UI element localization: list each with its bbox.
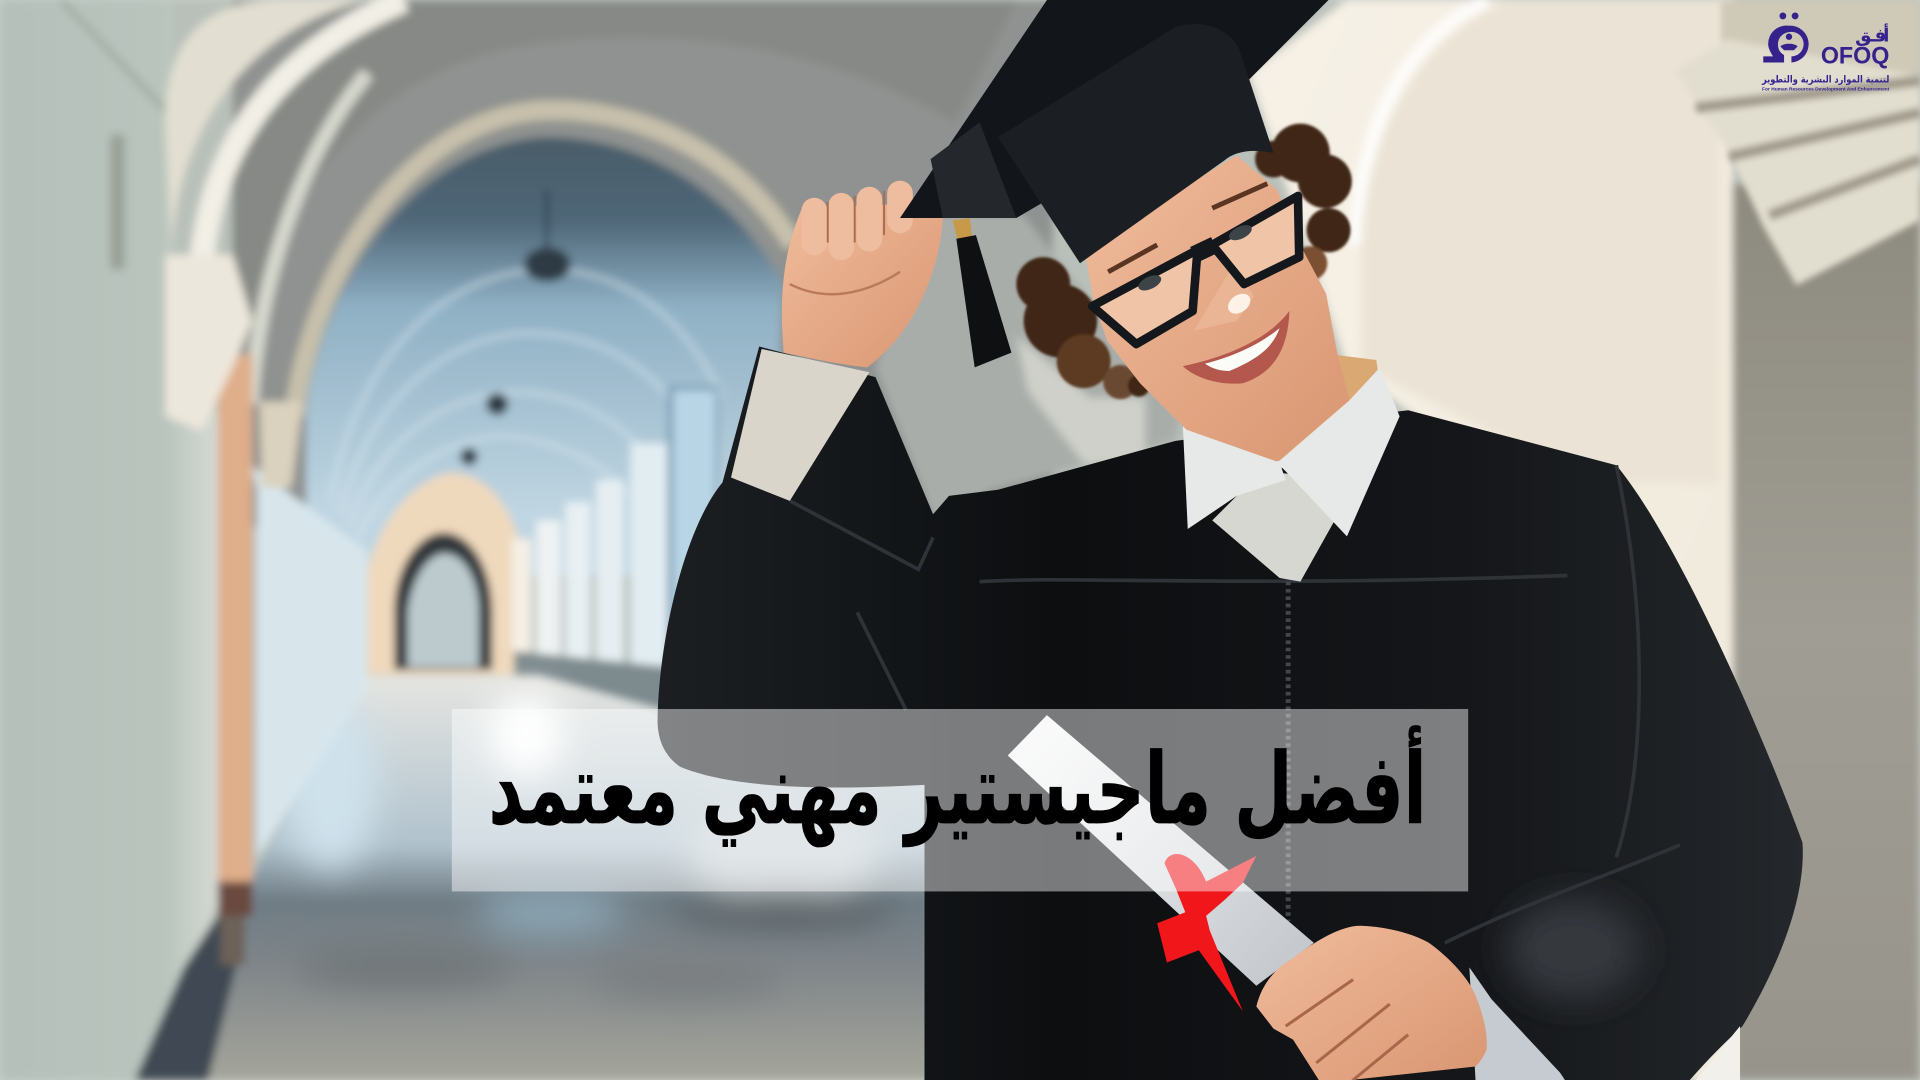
eyebrows bbox=[1108, 184, 1267, 272]
logo arabic tagline: لتنمية الموارد البشرية والتطوير bbox=[1761, 75, 1889, 86]
neck and inner collar bbox=[1224, 355, 1379, 471]
end of corridor arch bbox=[364, 473, 528, 675]
gown body and sleeves bbox=[658, 347, 1803, 1080]
logo english tagline: For Human Resources Development And Enhancement bbox=[1762, 87, 1890, 92]
glasses bbox=[1092, 196, 1299, 344]
corridor floor bbox=[135, 676, 931, 1080]
face bbox=[1084, 156, 1349, 462]
arcade windows bbox=[512, 386, 719, 669]
curly hair bbox=[1016, 124, 1352, 399]
ceiling lamps bbox=[460, 190, 571, 465]
nose bbox=[1194, 263, 1254, 331]
title text: أفضل ماجيستير مهني معتمد bbox=[489, 725, 1427, 847]
left arch and column bbox=[165, 0, 367, 260]
logo latin name: OFOQ bbox=[1821, 43, 1889, 70]
graduation cap bbox=[900, 0, 1329, 263]
shirt collar bbox=[1183, 367, 1400, 536]
title banner bbox=[452, 709, 1468, 891]
logo icon bbox=[1763, 12, 1809, 62]
cap tassel bbox=[953, 218, 1011, 367]
gown folds bbox=[790, 465, 1680, 943]
sleeve highlight bbox=[1506, 898, 1641, 1000]
OFOQ logo bbox=[1761, 12, 1890, 92]
red ribbon bbox=[1157, 854, 1256, 1011]
raised shirt cuff bbox=[731, 349, 869, 501]
smile bbox=[1183, 311, 1289, 384]
white wall strip bbox=[1696, 1026, 1740, 1080]
wall behind the graduate bbox=[876, 214, 1182, 527]
left wall bbox=[0, 0, 218, 1080]
right wall and pillar bbox=[1249, 0, 1733, 1080]
lower shirt cuff bbox=[1469, 967, 1565, 1080]
right column capital bbox=[1675, 0, 1920, 285]
logo arabic name: أفــق bbox=[1855, 24, 1889, 47]
diploma scroll bbox=[1008, 715, 1314, 986]
zipper bbox=[1286, 582, 1290, 921]
corridor vault ceiling bbox=[233, 0, 1053, 675]
graduate figure bbox=[658, 0, 1803, 1080]
raised hand bbox=[782, 191, 943, 367]
lower hand bbox=[1256, 926, 1487, 1080]
shirt front bbox=[1212, 471, 1335, 582]
